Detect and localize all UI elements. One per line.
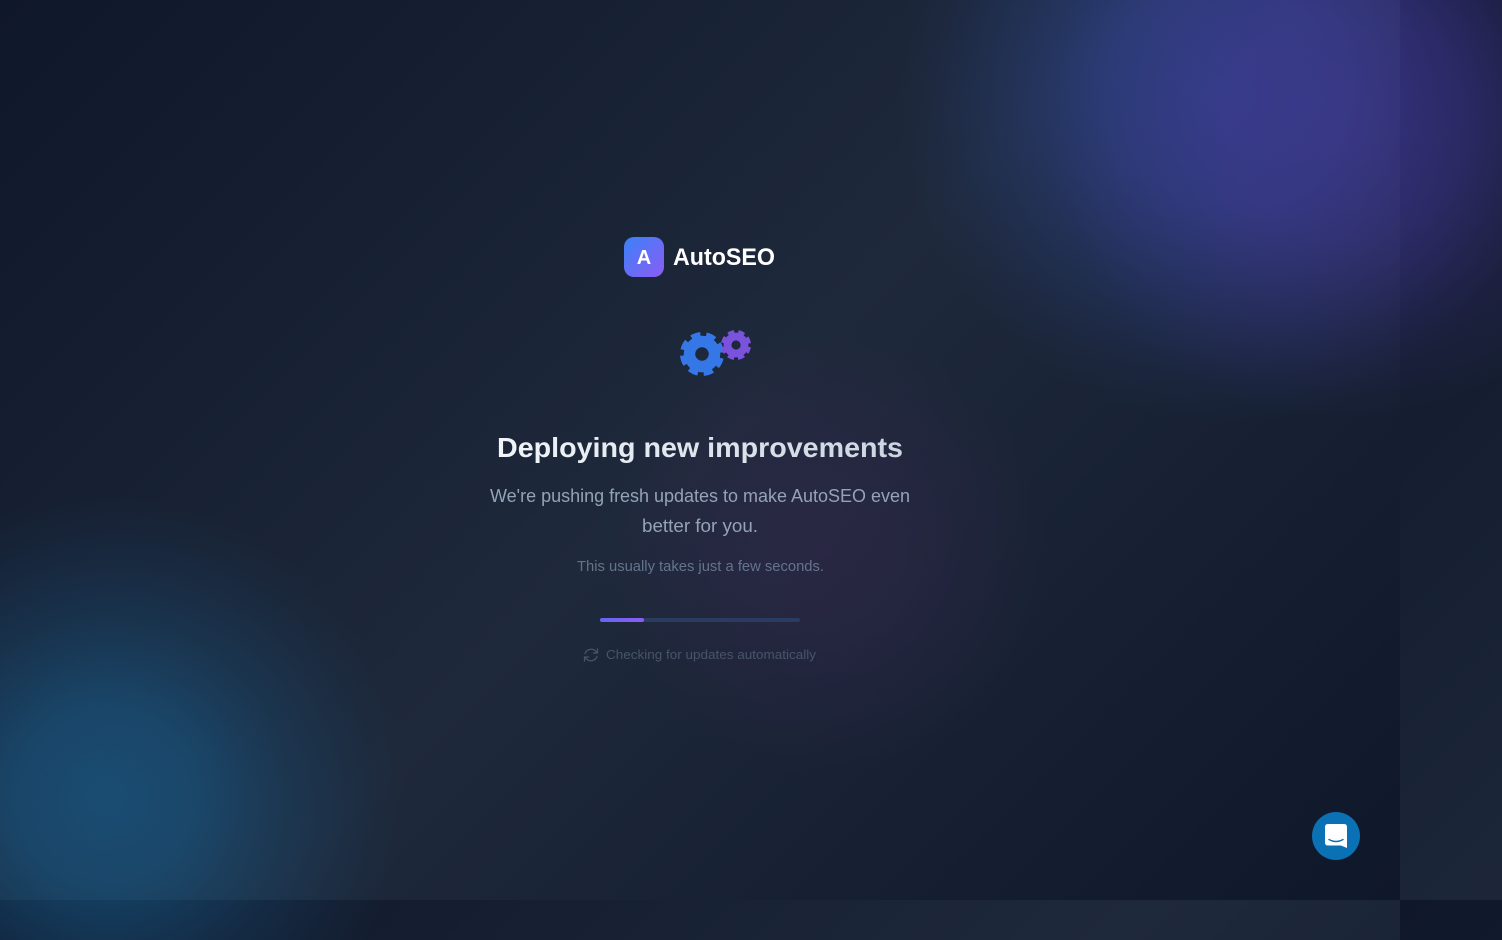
progress track bbox=[600, 618, 800, 622]
logo mark: A bbox=[637, 247, 651, 269]
progress bar bbox=[600, 618, 800, 622]
description text: better for you. bbox=[642, 516, 758, 536]
status line bbox=[584, 647, 817, 662]
heading: Deploying new improvements bbox=[497, 432, 903, 463]
chat button bbox=[1312, 812, 1360, 860]
status text: Checking for updates automatically bbox=[606, 647, 817, 662]
icon: large blue gear bbox=[679, 331, 725, 377]
note text: This usually takes just a few seconds. bbox=[577, 559, 824, 575]
icon: chat bubble bbox=[1325, 824, 1347, 848]
icon: small purple gear bbox=[721, 330, 751, 360]
description text bbox=[490, 486, 910, 536]
progress fill bbox=[600, 618, 644, 622]
icon: gears bbox=[679, 330, 751, 377]
icon: refresh bbox=[584, 649, 598, 661]
logo bbox=[624, 237, 775, 277]
logo mark bbox=[624, 237, 664, 277]
logo wordmark: AutoSEO bbox=[673, 244, 775, 271]
description text: We're pushing fresh updates to make AutoSEO even bbox=[490, 486, 910, 506]
